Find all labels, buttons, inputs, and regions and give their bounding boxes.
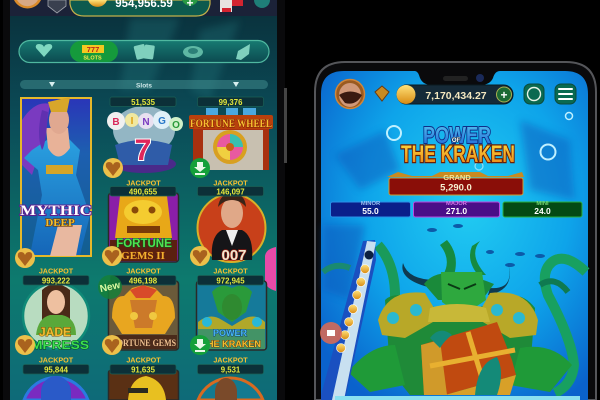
- heart tab: [36, 44, 52, 57]
- jackpot title: JACKPOT: [126, 356, 161, 364]
- jackpot counter: 91,635: [131, 366, 156, 374]
- arms: [348, 345, 405, 392]
- jackpot counter: 496,198: [129, 276, 158, 286]
- heart button: [103, 158, 123, 178]
- tile: Bingo: O: [172, 120, 180, 131]
- left phone side button: [284, 88, 287, 163]
- fish school: [427, 224, 545, 267]
- floating camera button: [320, 322, 342, 344]
- mini jackpot: MINI: [536, 201, 549, 207]
- gift icon: [220, 0, 243, 12]
- tile: Mythic Deep: [15, 97, 92, 268]
- jackpot title: JACKPOT: [213, 178, 248, 188]
- tile: Jade Empress: [15, 266, 89, 355]
- VIP badge: [48, 0, 66, 13]
- grand jackpot: GRAND: [443, 173, 471, 182]
- game logo: OF: [452, 138, 460, 144]
- left phone frame: [3, 0, 285, 400]
- category tabs: [19, 40, 269, 62]
- menu button: [555, 84, 576, 104]
- mini jackpot: 24.0: [534, 206, 551, 216]
- mini jackpot: [503, 201, 582, 217]
- jackpot counter: 9,531: [221, 366, 241, 374]
- game logo: THE KRAKEN: [401, 141, 515, 168]
- jackpot counter: 51,535: [131, 98, 156, 107]
- tile: 007: 007: [221, 247, 247, 264]
- major jackpot: 271.0: [446, 206, 467, 216]
- tile: Jade Empress: JADE: [39, 325, 71, 339]
- roulette tab: [183, 46, 203, 58]
- tile: Fortune Gems II: [102, 178, 178, 266]
- tile: Bingo: I: [131, 116, 134, 127]
- heart button: [190, 246, 210, 266]
- tentacles: [378, 245, 395, 340]
- coin balance pill: [70, 0, 210, 16]
- tile: Power of the Kraken: [190, 266, 266, 355]
- heart button: [15, 335, 35, 355]
- tile: Bingo: N: [142, 117, 150, 128]
- top status bar: [10, 0, 277, 16]
- camera notch details: [443, 74, 484, 82]
- jackpot title: JACKPOT: [126, 178, 161, 188]
- jackpot title: JACKPOT: [213, 266, 248, 276]
- download button: [190, 158, 210, 178]
- right phone: [315, 62, 596, 400]
- genie tile: [24, 376, 88, 400]
- left screen background: [10, 0, 277, 400]
- tile: Power of the Kraken: POWER: [213, 328, 247, 338]
- active slots tab: SLOTS: [83, 56, 102, 62]
- player avatar: [14, 0, 41, 8]
- jackpot title: JACKPOT: [126, 266, 161, 276]
- tile: Fortune Gems: [98, 266, 178, 355]
- bottom row tiles: [23, 356, 264, 400]
- tile: Bingo: G: [158, 116, 166, 127]
- horns: [440, 240, 486, 275]
- jackpot title: JACKPOT: [213, 356, 248, 364]
- tile: Mythic Deep: DEEP: [45, 217, 75, 229]
- download button: [190, 335, 210, 355]
- kraken character: [323, 240, 586, 395]
- game logo: POWER: [423, 122, 491, 148]
- tile: Bingo: [103, 97, 183, 178]
- armored body: [385, 295, 535, 395]
- minor jackpot: [330, 201, 410, 217]
- jackpot counter: 95,844: [44, 366, 69, 374]
- right screen background: [321, 71, 588, 400]
- game header bar: [336, 80, 576, 108]
- minor jackpot: 55.0: [362, 206, 379, 216]
- bottom spin bar: [335, 396, 580, 400]
- head: [441, 272, 486, 316]
- player avatar: [336, 80, 364, 108]
- major jackpot: [414, 201, 500, 217]
- bubbles: [387, 112, 572, 170]
- settings gear: [254, 0, 270, 8]
- heart button: [102, 335, 122, 355]
- jackpot counter: 972,945: [216, 276, 245, 286]
- warrior tile: [198, 378, 263, 400]
- pink side tab: [265, 247, 276, 291]
- slots section band: Slots: [136, 82, 152, 90]
- tile: Fortune Gems II: FORTUNE: [116, 238, 172, 250]
- heart button: [15, 248, 35, 268]
- coin balance: 7,170,434.27: [425, 90, 487, 102]
- tile: Mythic Deep: MYTHIC: [20, 203, 92, 219]
- jackpot counter: 490,655: [129, 188, 158, 196]
- jackpot title: JACKPOT: [39, 266, 74, 276]
- jackpot counter: [23, 364, 89, 374]
- cards tab: [133, 44, 155, 60]
- jackpot counter: 99,376: [219, 98, 243, 107]
- slots section band: [20, 80, 268, 90]
- tile: 007: [190, 178, 276, 291]
- tile: Fortune Wheel: FORTUNE WHEEL: [190, 118, 272, 130]
- active slots tab: [70, 41, 118, 62]
- tile: Bingo: B: [112, 117, 120, 128]
- major jackpot: MAJOR: [446, 201, 468, 207]
- info button: [524, 84, 544, 104]
- jackpot title: JACKPOT: [39, 356, 74, 364]
- active slots tab: 777: [87, 45, 99, 54]
- tile: Fortune Wheel: [189, 97, 273, 178]
- jackpot counter: 146,097: [216, 188, 245, 196]
- rocket tab: [236, 44, 250, 60]
- tile: Fortune Gems II: GEMS II: [121, 250, 165, 262]
- grand jackpot: 5,290.0: [440, 182, 472, 194]
- game logo: [401, 122, 515, 168]
- tile: Bingo: 7: [135, 134, 151, 167]
- jackpot counter: [110, 364, 176, 374]
- jackpot counter: [198, 364, 264, 374]
- minor jackpot: MINOR: [361, 201, 381, 207]
- grand jackpot: [387, 172, 524, 195]
- tile: Jade Empress: MPRESS: [31, 340, 89, 352]
- VIP badge: [375, 86, 389, 101]
- shoulder armor: [378, 292, 440, 338]
- jackpot counter: 993,222: [42, 276, 71, 286]
- coin balance: +: [500, 88, 508, 102]
- coin balance: [396, 85, 513, 104]
- right phone frame: [315, 62, 596, 400]
- left phone: [3, 0, 287, 400]
- heart button: [102, 246, 122, 266]
- new badge: New: [99, 280, 122, 295]
- progress meter: [321, 240, 376, 400]
- treasure chest: [421, 322, 516, 395]
- tile: Fortune Gems: FORTUNE GEMS: [112, 339, 176, 349]
- pharaoh tile: [108, 370, 178, 400]
- tile: Power of the Kraken: HE KRAKEN: [207, 339, 261, 350]
